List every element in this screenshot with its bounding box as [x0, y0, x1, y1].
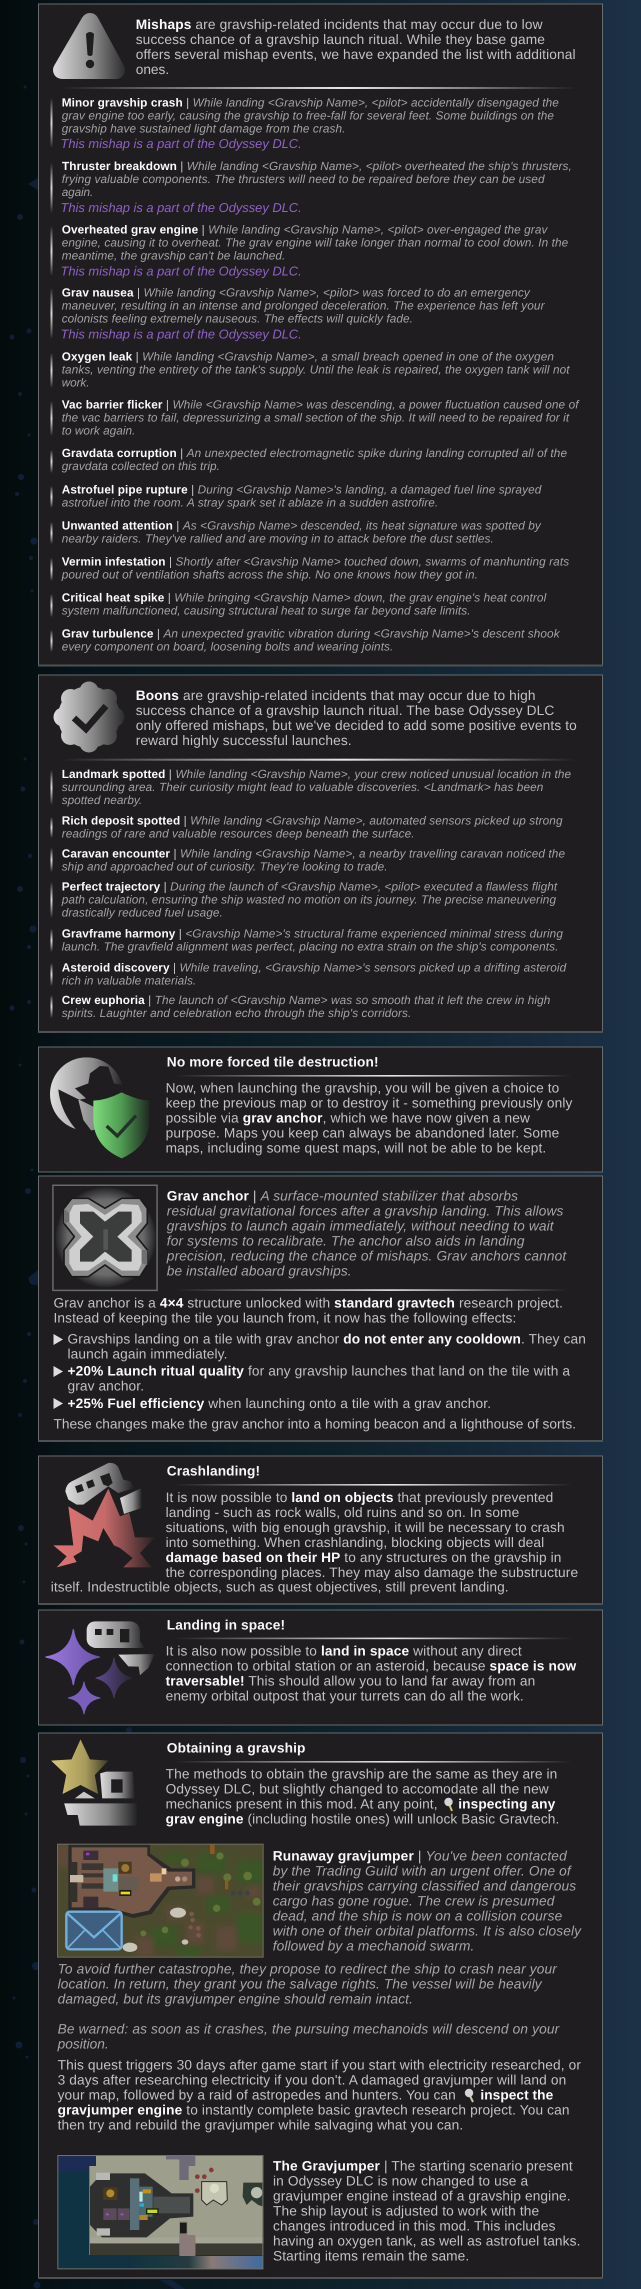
mishap: oxygen leak [50, 349, 570, 389]
intro text: mishaps: success chance of a gravship launch ritual. While they base game [136, 32, 545, 47]
icon: inspect magnifier [465, 2089, 473, 2102]
boon: landmark spotted: Landmark spotted | While landing <Gravship Name>, your crew noticed unusual location in the [62, 767, 572, 781]
intro text: mishaps: offers several mishap events, we have expanded the list with additional [136, 47, 576, 62]
the gravjumper description: gravjumper engine instead of a gravship engine. [273, 2188, 571, 2203]
mishap: gravdata corruption [50, 446, 567, 473]
boon: asteroid discovery: Asteroid discovery | While traveling, <Gravship Name>'s sensors picked up a drifting asteroid [62, 961, 567, 975]
mishap: grav turbulence: Grav turbulence | An unexpected gravitic vibration during <Gravship Name>'s descent shook [62, 626, 561, 640]
quest trigger text: your map, followed by a raid of astropedes and hunters. You can [58, 2088, 456, 2103]
mishap: unwanted attention: Unwanted attention | As <Gravship Name> descended, its heat signature was spotted by [62, 518, 542, 532]
the gravjumper description: The ship layout is adjusted to work with the [273, 2203, 539, 2218]
mishap: thruster breakdown [50, 159, 572, 215]
boon: rich deposit spotted [50, 814, 563, 841]
description text: for systems to recalibrate. The anchor also aids in landing [167, 1233, 525, 1248]
mishap: thruster breakdown: This mishap is a part of the Odyssey DLC. [60, 200, 302, 215]
mishap: thruster breakdown: again. [62, 185, 93, 199]
mishap: critical heat spike [50, 590, 547, 617]
quest story text: position. [57, 2036, 109, 2051]
mishap: minor gravship crash: Minor gravship crash | While landing <Gravship Name>, <pilot> accidentally disengaged the [62, 96, 559, 110]
boon: perfect trajectory: Perfect trajectory | During the launch of <Gravship Name>, <pilot> executed a flawless flight [62, 879, 558, 893]
mishap: astrofuel pipe rupture [50, 482, 542, 509]
boon: asteroid discovery [50, 961, 567, 988]
paragraph [54, 1296, 563, 1326]
description text: Grav anchor | A surface-mounted stabilizer that absorbs [167, 1188, 518, 1203]
mishap: vermin infestation: Vermin infestation | Shortly after <Gravship Name> touched down, swarms of manhunting rats [62, 554, 569, 568]
runaway gravjumper description: followed by a mechanoid swarm. [273, 1938, 474, 1953]
panel: mishaps [38, 4, 603, 666]
quest trigger text [58, 2058, 581, 2133]
heading: Crashlanding! [167, 1464, 260, 1479]
mishap: vac barrier flicker: the vac barriers to fail, depressurizing a small section of the ship. It will need to be repaired for it [62, 410, 570, 424]
body text: The methods to obtain the gravship are the same as they are in [166, 1767, 557, 1782]
mishap: gravdata corruption: gravdata collected on this trip. [62, 459, 220, 473]
boon: landmark spotted: surrounding area. Their curiosity might lead to valuable discoveries. <Landmark> has been [62, 780, 544, 794]
runaway gravjumper description: Runaway gravjumper | You've been contacted [273, 1848, 567, 1863]
mishap: unwanted attention [50, 518, 542, 545]
intro text: boons: success chance of a gravship launch ritual. The base Odyssey DLC [136, 703, 554, 718]
bullet: no cooldown: launch again immediately. [68, 1347, 227, 1362]
body text [166, 1081, 573, 1156]
bullet: launch ritual quality: +20% Launch ritual quality for any gravship launches that land on the tile with a [68, 1364, 570, 1379]
boon: gravframe harmony [50, 927, 563, 954]
boon: perfect trajectory: path calculation, ensuring the ship wasted no motion on its journey. The precise maneuvering [61, 892, 556, 906]
boon: landmark spotted: spotted nearby. [62, 793, 142, 807]
bullet: launch ritual quality [54, 1364, 570, 1394]
mishap: gravdata corruption: Gravdata corruption | An unexpected electromagnetic spike during landing corrupted all of the [62, 446, 567, 460]
body text: enemy orbital outpost that your turrets can do all the work. [166, 1689, 524, 1704]
mishap: critical heat spike: Critical heat spike | While bringing <Gravship Name> down, the grav engine's heat control [62, 590, 547, 604]
quest story text: damaged, but its gravjumper engine should remain intact. [58, 1992, 413, 2007]
icon: boon badge with check [54, 682, 124, 752]
panel: obtaining a gravship [38, 1733, 603, 2278]
mishap: astrofuel pipe rupture: astrofuel into the room. A stray spark set it ablaze in a sudden astrofire. [62, 495, 438, 509]
the gravjumper description [273, 2158, 580, 2263]
heading: Landing in space! [167, 1617, 285, 1632]
body text: into something. When crashlanding, blocking objects will deal [166, 1535, 544, 1550]
boon: crew euphoria [50, 993, 551, 1020]
icon: warning triangle [62, 22, 116, 70]
boon: crew euphoria: Crew euphoria | The launch of <Gravship Name> was so smooth that it left the crew in high [62, 993, 551, 1007]
mishap: overheated grav engine: meantime, the gravship can't be launched. [62, 248, 285, 262]
icon: globe with shield [50, 1057, 149, 1158]
mishap: grav turbulence [50, 626, 561, 653]
screenshot: gravjumper start map [57, 2155, 263, 2269]
mishap: overheated grav engine: This mishap is a part of the Odyssey DLC. [60, 263, 302, 278]
paragraph: Grav anchor is a 4×4 structure unlocked with standard gravtech research project. [54, 1296, 563, 1311]
the gravjumper description: The Gravjumper | The starting scenario present [273, 2158, 573, 2173]
the gravjumper description: changes introduced in this mod. This includes [273, 2218, 556, 2233]
runaway gravjumper description: by the Trading Guild with an urgent offer. One of [273, 1863, 572, 1878]
mishap: unwanted attention: nearby raiders. They've rallied and are moving in to attack before the dust settles. [62, 531, 494, 545]
mishap: astrofuel pipe rupture: Astrofuel pipe rupture | During <Gravship Name>'s landing, a damaged fuel line sprayed [62, 482, 542, 496]
boon: perfect trajectory [50, 879, 558, 919]
runaway gravjumper description: cargo has gone rogue. The crew is presumed [273, 1893, 555, 1908]
icon: ship among sparkles [46, 1621, 155, 1714]
bullet: no cooldown [54, 1332, 586, 1362]
heading: No more forced tile destruction! [167, 1055, 379, 1070]
body text: connection to orbital station or an asteroid, because space is now [166, 1659, 576, 1674]
intro text: boons [136, 688, 577, 748]
screenshot: runaway gravjumper map [57, 1844, 263, 1957]
body text: landing - such as rock walls, old ruins and so on. In some [166, 1505, 519, 1520]
mishap: vac barrier flicker [50, 397, 580, 437]
mishap: grav nausea [50, 286, 546, 342]
body text: mechanics present in this mod. At any point, [166, 1797, 438, 1812]
mishap: overheated grav engine [50, 222, 569, 278]
mishap: vac barrier flicker: Vac barrier flicker | While <Gravship Name> was descending, a power fluctuation caused one of [62, 397, 580, 411]
mishap: vermin infestation: poured out of ventilation shafts across the ship. No one knows how they got in. [61, 567, 478, 581]
mishap: grav turbulence: every component on board, loosening bolts and wearing joints. [62, 639, 393, 653]
mishap: oxygen leak: tanks, venting the entirety of the tank's supply. Until the leak is repaired, the oxygen tank will not [62, 362, 570, 376]
body text: Odyssey DLC, but slightly changed to accomodate all the new [166, 1782, 549, 1797]
the gravjumper description: having an oxygen tank, as well as astrofuel tanks. [273, 2233, 580, 2248]
the gravjumper description: in Odyssey DLC is now changed to use a [273, 2173, 528, 2188]
mishap: vac barrier flicker: to work again. [62, 423, 135, 437]
body text: keep the previous map or to destroy it - something previously only [166, 1096, 573, 1111]
body text: It is also now possible to land in space without any direct [166, 1644, 522, 1659]
mishap: thruster breakdown: Thruster breakdown | While landing <Gravship Name>, <pilot> overheated the ship's thrusters, [62, 159, 572, 173]
quest trigger text: 3 days after researching electricity if you don't. A damaged gravjumper will land on [58, 2073, 566, 2088]
icon: inspect magnifier [444, 1798, 453, 1811]
mishap: minor gravship crash: gravship have sustained light damage from the crash. [62, 122, 345, 136]
paragraph: Instead of keeping the tile you launch from, it now has the following effects: [54, 1311, 516, 1326]
runaway gravjumper description [273, 1848, 582, 1953]
body text: situations, with big enough gravship, it will be necessary to crash [166, 1520, 565, 1535]
boon: caravan encounter: ship and approached out of curiosity. They're looking to trade. [62, 860, 387, 874]
body text: inspecting any [458, 1797, 556, 1812]
quest story text [57, 1962, 561, 2051]
mishap: grav nausea: colonists feeling extremely nauseous. The effects will quickly fade. [62, 312, 413, 326]
body text: purpose. Maps you keep can always be abandoned later. Some [166, 1126, 559, 1141]
mishap: grav nausea: This mishap is a part of the Odyssey DLC. [60, 327, 302, 342]
panel: no more forced tile destruction [38, 1047, 602, 1172]
icon: grav anchor structure [53, 1185, 157, 1291]
boon: crew euphoria: spirits. Laughter and celebration echo through the ship's corridors. [62, 1006, 411, 1020]
panel: boons [38, 675, 603, 1032]
mishap: thruster breakdown: frying valuable components. The thrusters will need to be repaired before they can be used [62, 172, 545, 186]
description text: precision, reducing the chance of mishaps. Grav anchors cannot [166, 1248, 567, 1263]
body text: Now, when launching the gravship, you will be given a choice to [166, 1081, 560, 1096]
panel: grav anchor [38, 1176, 603, 1441]
description text [166, 1188, 567, 1278]
body text: traversable! This should allow you to land far away from an [166, 1674, 535, 1689]
body text: maps, including some quest maps, will not be able to be kept. [166, 1141, 546, 1156]
boon: caravan encounter [50, 847, 565, 874]
boon: gravframe harmony: launch. The gravfield alignment was perfect, placing no extra strain on the ship's components. [62, 940, 558, 954]
bullet: launch ritual quality: grav anchor. [68, 1379, 144, 1394]
description text: residual gravitational forces after a gravship landing. This allows [167, 1203, 564, 1218]
boon: gravframe harmony: Gravframe harmony | <Gravship Name>'s structural frame experienced minimal stress during [62, 927, 563, 941]
mishap: oxygen leak: Oxygen leak | While landing <Gravship Name>, a small breach opened in one of the oxygen [62, 349, 554, 363]
quest trigger text: then try and rebuild the gravjumper while salvaging what you can. [58, 2118, 463, 2133]
boon: caravan encounter: Caravan encounter | While landing <Gravship Name>, a nearby travelling caravan noticed the [62, 847, 565, 861]
intro text: boons: reward highly successful launches. [136, 733, 352, 748]
body text: grav engine (including hostile ones) will unlock Basic Gravtech. [166, 1812, 559, 1827]
runaway gravjumper description: with one of their orbital platforms. It is also closely [273, 1923, 582, 1938]
panel: landing in space [38, 1610, 602, 1725]
heading: Obtaining a gravship [167, 1741, 305, 1756]
body text: itself. Indestructible objects, such as quest objectives, still prevent landing. [51, 1579, 509, 1594]
quest story text: location. In return, they grant you the salvage rights. The vessel will be heavily [58, 1977, 543, 1992]
body text: damage based on their HP to any structures on the gravship in [166, 1550, 561, 1565]
boon: asteroid discovery: rich in valuable materials. [62, 974, 196, 988]
mishap: overheated grav engine: Overheated grav engine | While landing <Gravship Name>, <pilot> over-engaged the grav [62, 222, 548, 236]
body text: the corresponding places. They may also damage the substructure [166, 1565, 578, 1580]
body text: It is now possible to land on objects that previously prevented [166, 1490, 553, 1505]
closing sentence: These changes make the grav anchor into a homing beacon and a lighthouse of sorts. [54, 1416, 576, 1431]
body text [166, 1644, 576, 1704]
mishap: minor gravship crash [50, 96, 559, 151]
the gravjumper description: Starting items remain the same. [273, 2248, 469, 2263]
boon: rich deposit spotted: Rich deposit spotted | While landing <Gravship Name>, automated sensors picked up strong [62, 814, 563, 828]
bullet: no cooldown: Gravships landing on a tile with grav anchor do not enter any cooldown. They can [68, 1332, 586, 1347]
mishap: oxygen leak: work. [62, 375, 90, 389]
description text: be installed aboard gravships. [167, 1263, 352, 1278]
intro text: boons: only offered mishaps, but we've decided to add some positive events to [136, 718, 577, 733]
intro text: mishaps [136, 17, 576, 77]
background stars [10, 86, 185, 2289]
intro text: mishaps: ones. [136, 62, 169, 77]
icon: mail envelope [66, 1912, 122, 1949]
runaway gravjumper description: dead, and the ship is now on a collision course [273, 1908, 563, 1923]
mishap: minor gravship crash: This mishap is a part of the Odyssey DLC. [60, 136, 302, 151]
quest story text: To avoid further catastrophe, they propose to redirect the ship to crash near your [58, 1962, 558, 1977]
mishap: grav nausea: maneuver, resulting in an intense and prolonged deceleration. The experience has left your [62, 299, 546, 313]
mishap: vermin infestation [50, 554, 569, 581]
mishap: overheated grav engine: engine, causing it to overheat. The grav engine will take longer than normal to cool down. In the [62, 235, 569, 249]
quest trigger text: inspect the [480, 2088, 554, 2103]
description text: gravships to launch again immediately, without needing to wait [167, 1218, 555, 1233]
runaway gravjumper description: their gravships carrying classified and dangerous [273, 1878, 576, 1893]
boon: perfect trajectory: drastically reduced fuel usage. [62, 905, 223, 919]
mishap: critical heat spike: system malfunctioned, causing structural heat to surge far beyond safe limits. [62, 603, 470, 617]
boon: rich deposit spotted: readings of rare and valuable resources deep beneath the surface. [62, 827, 414, 841]
bullet: fuel efficiency: +25% Fuel efficiency when launching onto a tile with a grav anchor. [68, 1396, 491, 1411]
body text [51, 1490, 578, 1594]
panel: crashlanding [38, 1456, 603, 1604]
mishap: grav nausea: Grav nausea | While landing <Gravship Name>, <pilot> was forced to do an emergency [62, 286, 531, 300]
quest story text: Be warned: as soon as it crashes, the pursuing mechanoids will descend on your [58, 2021, 561, 2036]
body text: possible via grav anchor, which we have now given a new [166, 1111, 530, 1126]
boon: landmark spotted [50, 767, 572, 807]
intro text: mishaps: Mishaps are gravship-related incidents that may occur due to low [136, 17, 543, 32]
icon: star over ship [51, 1739, 137, 1826]
body text [166, 1767, 559, 1827]
icon: crashing ship [53, 1463, 155, 1567]
quest trigger text: gravjumper engine to instantly complete basic gravtech research project. You can [58, 2103, 569, 2118]
quest trigger text: This quest triggers 30 days after game start if you start with electricity researched, or [58, 2058, 581, 2073]
intro text: boons: Boons are gravship-related incidents that may occur due to high [136, 688, 535, 703]
mishap: minor gravship crash: grav engine too early, causing the gravship to free-fall for several feet. Some buildings on the [62, 108, 554, 122]
